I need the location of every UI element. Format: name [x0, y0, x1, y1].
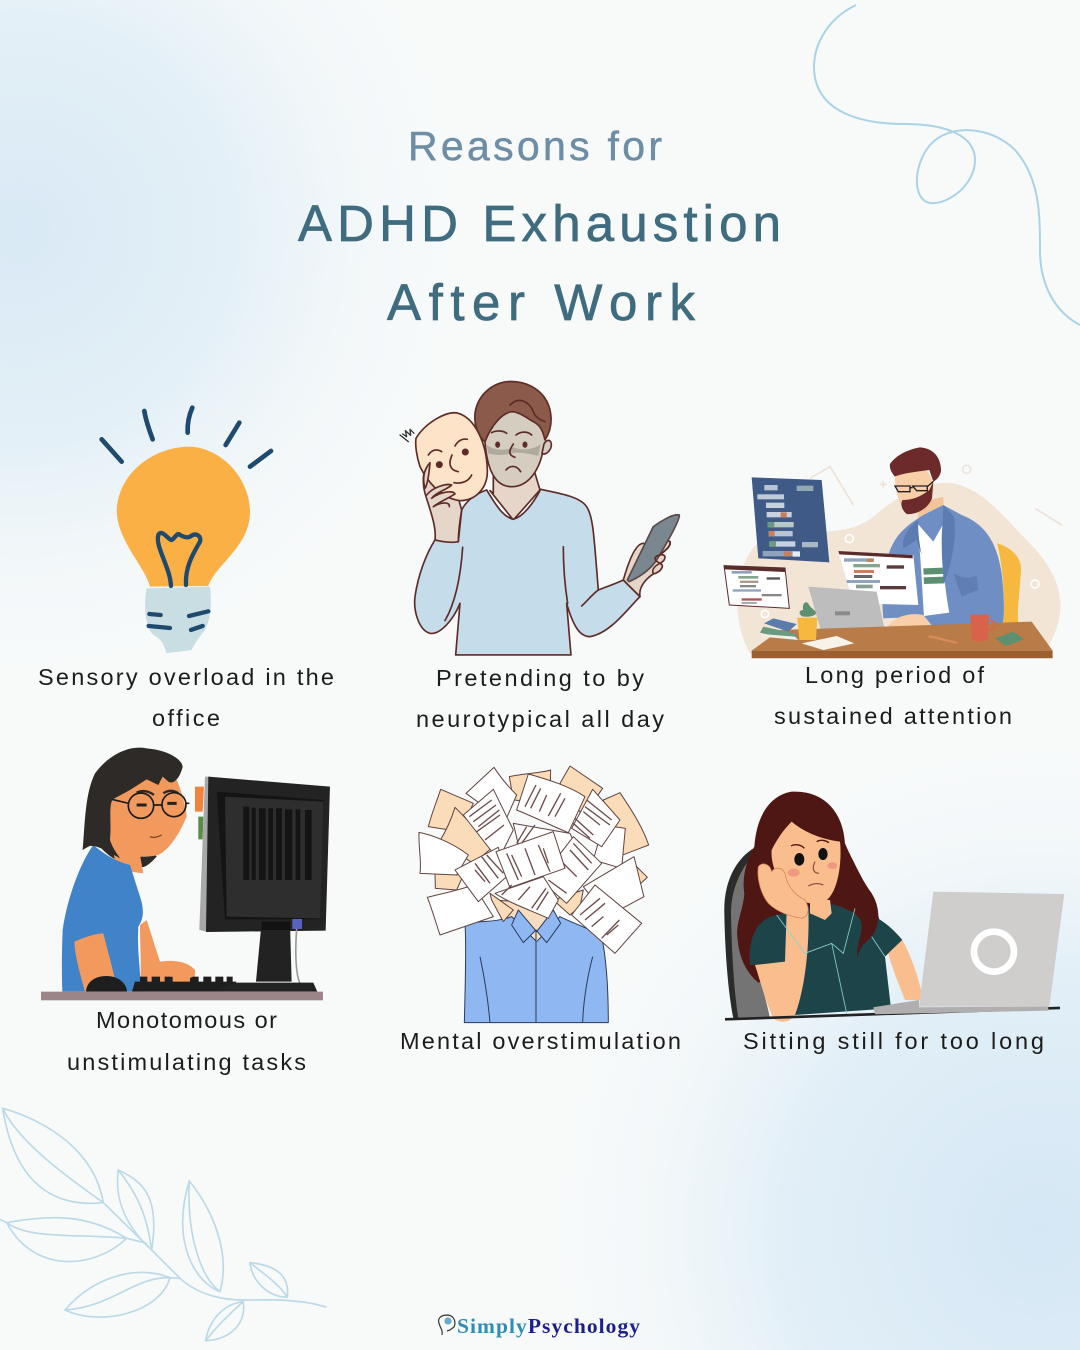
caption: sustained attention	[774, 662, 1012, 729]
title	[298, 123, 781, 331]
panel: sensory overload	[38, 408, 334, 731]
caption: pretending: Pretending to by	[436, 665, 644, 691]
decorative leaf branch bottom left	[0, 1108, 327, 1341]
heading: reasons for: Reasons for	[408, 123, 662, 169]
illustration: man holding smiling mask	[400, 382, 679, 655]
caption: sustained attention: Long period of	[805, 662, 984, 688]
caption: monotonous tasks: unstimulating tasks	[67, 1049, 306, 1075]
panel: monotonous tasks	[41, 748, 330, 1075]
panel: pretending	[400, 382, 679, 732]
caption: monotonous tasks	[67, 1007, 306, 1075]
heading: after work: After Work	[387, 274, 696, 331]
illustration: head of papers	[419, 766, 649, 1023]
illustration: programmer at desk	[724, 447, 1062, 658]
caption: sensory overload: office	[152, 705, 220, 731]
illustration: bored woman at laptop	[724, 792, 1064, 1022]
caption: sensory overload: Sensory overload in the	[38, 664, 334, 690]
caption: sitting still: Sitting still for too long	[743, 1028, 1044, 1054]
logo: Simply Psychology	[439, 1314, 640, 1338]
decorative swirl top right	[814, 5, 1080, 325]
illustration: person at computer	[41, 748, 330, 1000]
panel: mental overstimulation	[400, 766, 681, 1054]
caption: mental overstimulation: Mental overstimulation	[400, 1028, 681, 1054]
wordmark: SimplyPsychology	[457, 1314, 640, 1338]
caption: sensory overload	[38, 664, 334, 731]
heading: ADHD exhaustion: ADHD Exhaustion	[298, 195, 781, 252]
icon: light bulb	[102, 408, 271, 653]
panel: sitting still	[724, 792, 1064, 1054]
caption: sustained attention: sustained attention	[774, 703, 1012, 729]
caption: pretending	[416, 665, 664, 732]
panel: sustained attention	[724, 447, 1062, 729]
caption: pretending: neurotypical all day	[416, 706, 664, 732]
caption: monotonous tasks: Monotomous or	[96, 1007, 277, 1033]
icon: head silhouette	[439, 1315, 455, 1335]
